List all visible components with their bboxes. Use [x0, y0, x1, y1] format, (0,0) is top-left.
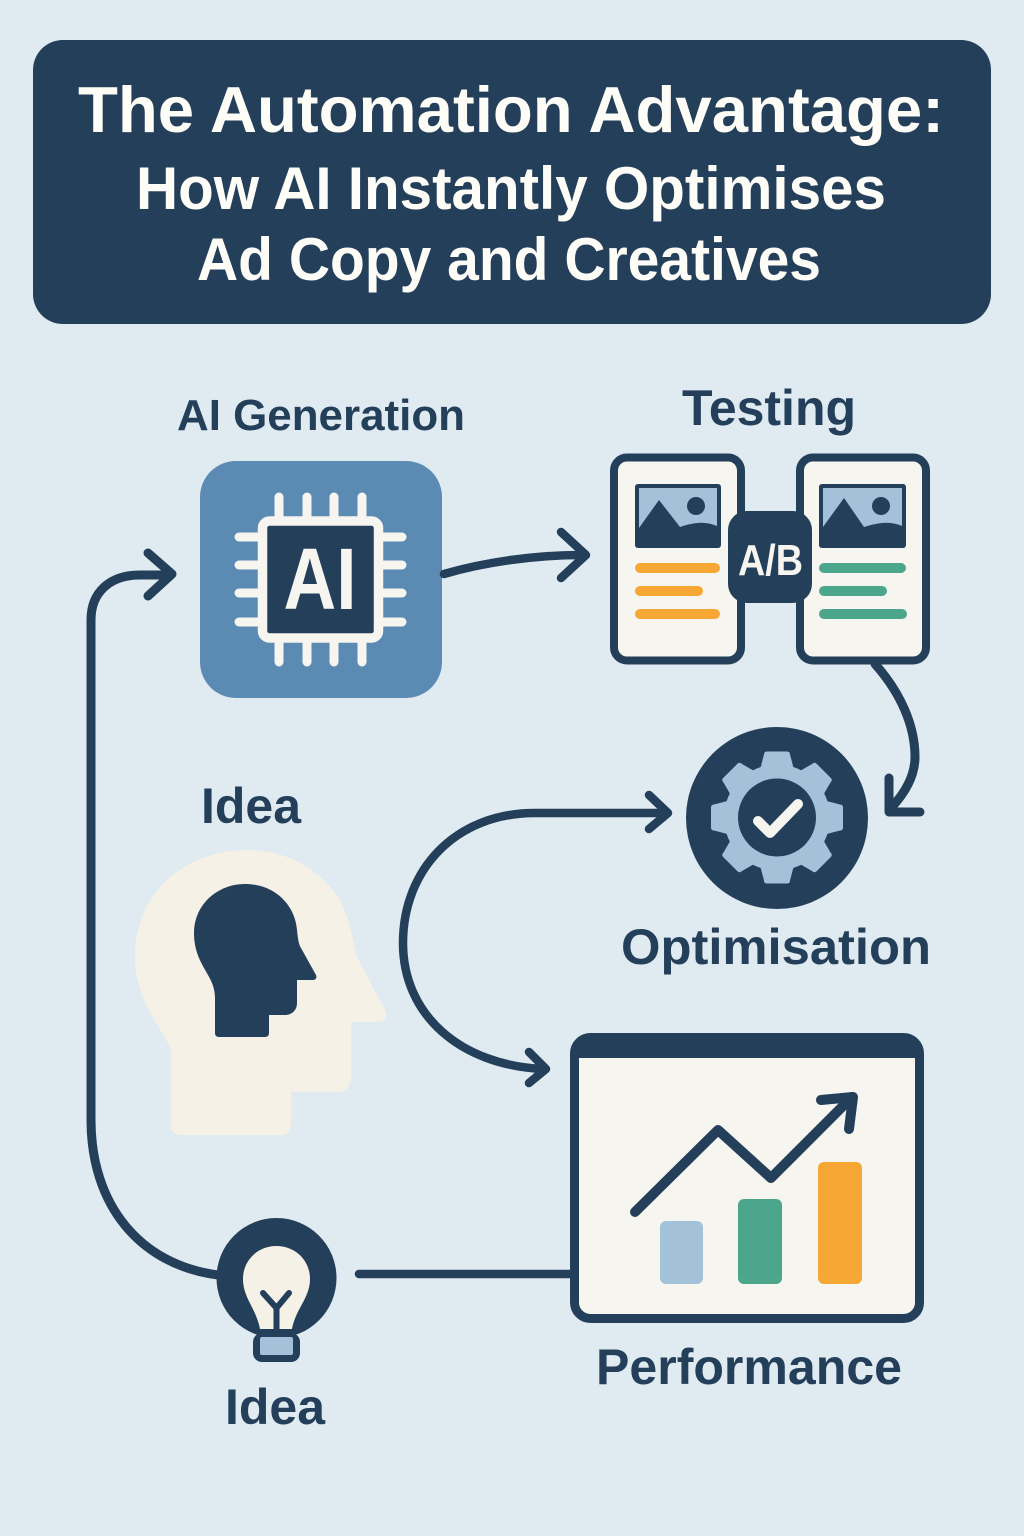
icon: head silhouette — [135, 850, 386, 1135]
heading: Optimisation: Optimisation — [621, 919, 931, 975]
icon: AI chip: AI — [284, 531, 356, 628]
arrow: AI generation to testing — [444, 532, 586, 578]
heading: AI Generation: AI Generation — [177, 391, 465, 440]
title banner: Ad Copy and Creatives — [197, 226, 821, 293]
heading: Testing: Testing — [682, 380, 856, 436]
arrow: idea bulb to AI generation — [91, 553, 218, 1275]
heading: Performance: Performance — [596, 1339, 902, 1395]
arrow: testing to optimisation — [875, 664, 920, 812]
icon: AI chip — [200, 461, 442, 698]
icon: A/B test cards — [614, 458, 926, 660]
icon: light bulb — [216, 1218, 336, 1362]
trend arrow — [635, 1097, 853, 1212]
heading: Idea (lower): Idea — [225, 1379, 326, 1435]
title banner — [33, 40, 991, 324]
title banner: How AI Instantly Optimises — [136, 155, 886, 222]
icon: optimisation gear — [686, 727, 868, 909]
bar: green — [738, 1199, 782, 1284]
icon: A/B test cards: A/B — [738, 536, 803, 585]
bar: orange — [818, 1162, 862, 1284]
title banner: The Automation Advantage: — [78, 73, 944, 146]
heading: Idea (upper): Idea — [201, 778, 302, 834]
panel: performance chart — [574, 1037, 920, 1318]
bar: blue — [660, 1221, 703, 1284]
arrow: optimisation to performance — [403, 795, 668, 1083]
line: performance to idea bulb — [359, 1270, 574, 1278]
